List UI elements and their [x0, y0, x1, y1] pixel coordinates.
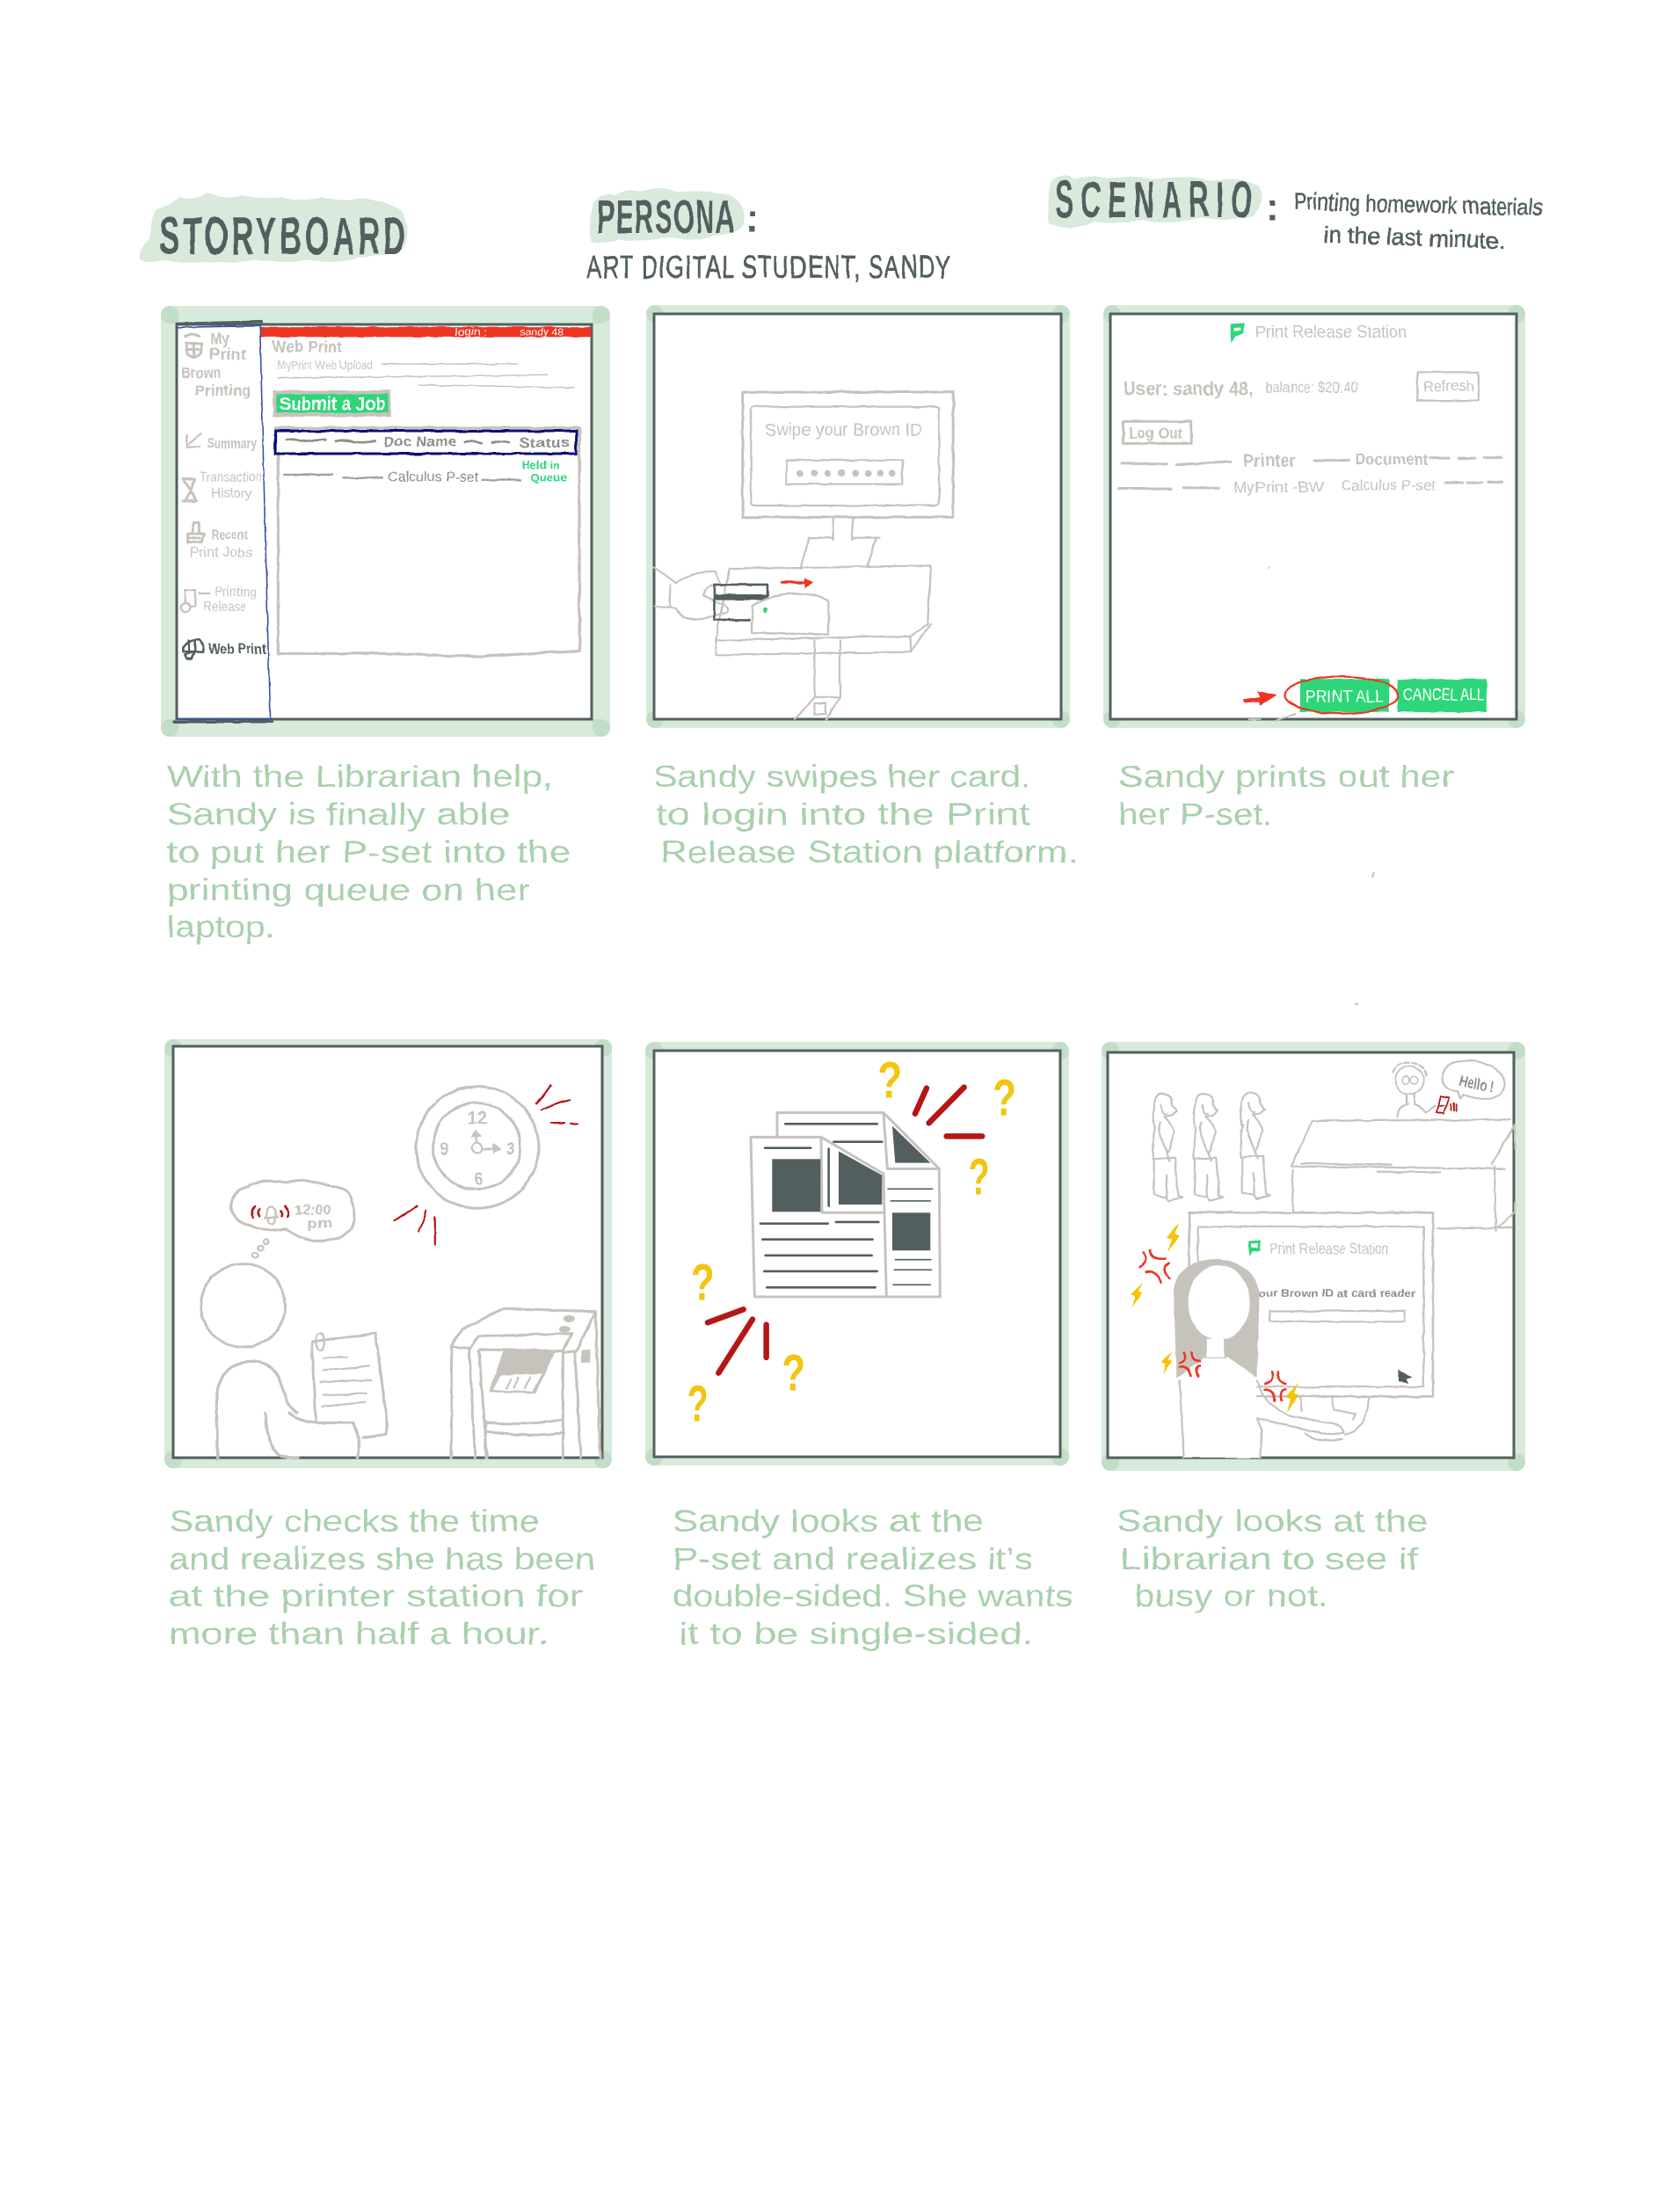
- caption 1: With the Librarian help,: [167, 760, 553, 794]
- sidebar: summary: [187, 433, 258, 452]
- header login text: [455, 326, 564, 338]
- green frame band: [170, 315, 601, 728]
- kiosk monitor: Swipe your Brown ID: [765, 419, 922, 440]
- colon: :: [745, 197, 759, 240]
- sidebar: recent print jobs: Recent: [212, 528, 248, 542]
- header login text: login :: [455, 326, 487, 338]
- caption 4: and realizes she has been: [169, 1542, 595, 1576]
- caption 4: more than half a hour.: [169, 1617, 549, 1651]
- sidebar: printing release: Printing: [215, 586, 257, 600]
- panel frame: [1110, 314, 1516, 719]
- wall clock: 6: [475, 1168, 483, 1189]
- thought bubble: 12:00: [295, 1202, 331, 1219]
- green frame band: [1110, 1051, 1516, 1462]
- thought bubble: [231, 1180, 354, 1258]
- table header row: Doc Name: [383, 434, 457, 450]
- refresh button: [1417, 372, 1479, 401]
- print all button: PRINT ALL: [1305, 687, 1384, 706]
- red arrow: [1243, 691, 1277, 706]
- librarian: [1393, 1062, 1435, 1117]
- sidebar: summary: Summary: [207, 435, 258, 452]
- caption 3: her P-set.: [1118, 797, 1273, 832]
- button: submit a job: Submit a Job: [280, 393, 386, 415]
- caption 2: to login into the Print: [656, 797, 1030, 832]
- back page: [777, 1113, 940, 1297]
- print all button: [1300, 679, 1389, 712]
- caption 4: Sandy checks the time: [169, 1504, 540, 1539]
- station sketch: balance: $20.40: [1266, 379, 1358, 397]
- table rows: MyPrint -BW: [1233, 478, 1325, 496]
- queue of students: [1153, 1092, 1270, 1201]
- scenario description line 1: Printing homework materials: [1293, 188, 1544, 221]
- heading: persona: [586, 189, 951, 285]
- caption 1: laptop.: [167, 910, 275, 944]
- table rows: Calculus P-set: [1341, 477, 1436, 493]
- caption 6: [1116, 1504, 1428, 1613]
- wall clock: 3: [506, 1138, 515, 1159]
- speech bubble: hello: [1443, 1060, 1505, 1099]
- caption 4: at the printer station for: [169, 1579, 583, 1613]
- paper: [311, 1333, 388, 1437]
- scenario description line 2: in the last minute.: [1323, 222, 1506, 254]
- panel 5: double-sided p-set: [654, 1051, 1060, 1457]
- table header row: [276, 431, 577, 454]
- screen sketch: [174, 322, 592, 722]
- speech bubble: hello: Hello !: [1458, 1072, 1495, 1095]
- sidebar: my print logo: My: [210, 331, 230, 349]
- panel frame: [654, 314, 1061, 719]
- kiosk monitor: [743, 392, 953, 517]
- cancel all button: [1398, 679, 1487, 712]
- station sketch: CANCEL ALL: [1403, 686, 1484, 704]
- log out button: Log Out: [1129, 424, 1182, 441]
- table job row: Held in: [522, 459, 560, 471]
- hand holding card: [654, 567, 727, 620]
- panel 4: checking the time: [173, 1046, 603, 1459]
- table rows: [1118, 450, 1502, 496]
- front desk: [1291, 1119, 1515, 1231]
- caption 5: double-sided. She wants: [673, 1579, 1073, 1613]
- sub heading: web upload: MyPrint Web Upload: [277, 359, 373, 373]
- question marks: ?: [969, 1149, 990, 1205]
- caption 6: busy or not.: [1134, 1579, 1328, 1613]
- caption 2: Sandy swipes her card.: [653, 760, 1030, 794]
- wall clock: 9: [440, 1139, 448, 1160]
- question marks: ?: [687, 1377, 709, 1433]
- scene sketch: [1131, 1060, 1515, 1458]
- highlight blob: storyboard: [139, 193, 408, 262]
- caption 3: [1118, 760, 1454, 832]
- scene sketch: [200, 1085, 600, 1459]
- red ringing phone: [1436, 1096, 1457, 1114]
- persona title: PERSONA: [597, 192, 735, 244]
- table rows: Printer: [1243, 450, 1296, 470]
- question marks: [687, 1052, 1016, 1433]
- header login text: sandy 48: [520, 326, 564, 338]
- printer: [451, 1308, 600, 1458]
- clock alarm marks: [395, 1085, 578, 1244]
- caption 2: Release Station platform.: [660, 835, 1078, 870]
- panel frame: [1108, 1052, 1514, 1458]
- sidebar: my print logo: Print: [209, 346, 247, 364]
- monitor: Print Release Station: [1269, 1240, 1389, 1257]
- brown id card: [714, 585, 767, 620]
- thought bubble: pm: [307, 1215, 332, 1232]
- highlight blob: persona: [590, 189, 744, 244]
- log out button: [1123, 421, 1191, 443]
- panel frame: [173, 1046, 602, 1458]
- caption 1: printing queue on her: [167, 873, 530, 907]
- caption 6: Librarian to see if: [1120, 1542, 1418, 1576]
- colon: :: [1266, 186, 1279, 229]
- flag logo and heading: [1231, 323, 1407, 343]
- station sketch: Print Release Station: [1255, 323, 1407, 342]
- person body: [216, 1361, 359, 1459]
- caption 1: to put her P-set into the: [167, 835, 571, 870]
- red header bar: [260, 327, 592, 337]
- sidebar: recent print jobs: Print Jobs: [189, 546, 252, 560]
- sidebar: web print active: [183, 639, 266, 659]
- table rows: Document: [1355, 450, 1428, 469]
- kiosk sketch: [654, 392, 953, 719]
- red circle highlight: [1285, 677, 1398, 714]
- caption 3: Sandy prints out her: [1118, 760, 1454, 794]
- sidebar: transaction history: History: [212, 486, 252, 501]
- table header row: Status: [519, 435, 571, 451]
- wall clock: 12: [467, 1107, 487, 1128]
- question marks: ?: [691, 1255, 715, 1311]
- panel 6: looking at the librarian: [1108, 1051, 1516, 1462]
- caption 2: [653, 760, 1078, 870]
- caption 5: Sandy looks at the: [673, 1504, 984, 1539]
- panel 2: card swipe: [654, 314, 1061, 719]
- question marks: ?: [877, 1052, 902, 1109]
- green frame band: [173, 1048, 603, 1459]
- sandy from behind: [1174, 1259, 1343, 1458]
- heading: scenario: [1048, 171, 1544, 254]
- green frame band: [1112, 314, 1516, 719]
- caption 5: P-set and realizes it’s: [673, 1542, 1033, 1576]
- sidebar: transaction history: [184, 470, 261, 501]
- sidebar: my print logo: [182, 331, 251, 399]
- table job row: Calculus P-set: [388, 469, 479, 484]
- sidebar: printing release: Release: [203, 600, 246, 615]
- caption 4: [169, 1504, 595, 1651]
- sidebar: printing release: [181, 586, 257, 615]
- monitor: [1189, 1212, 1433, 1440]
- sidebar: web print active: Web Print: [208, 641, 266, 657]
- heading: web print: Web Print: [272, 338, 342, 357]
- station sketch: [1118, 323, 1502, 720]
- sidebar: my print logo: Brown: [182, 364, 222, 382]
- question marks: ?: [782, 1346, 805, 1402]
- sidebar: transaction history: Transaction: [200, 470, 261, 484]
- panel 3: print release station: [1110, 314, 1516, 720]
- title text: STORYBOARD: [159, 207, 405, 266]
- caption 5: it to be single-sided.: [679, 1617, 1033, 1651]
- panel frame: [654, 1051, 1060, 1457]
- table job row: Queue: [530, 471, 567, 484]
- caption 1: [167, 760, 571, 944]
- question marks: ?: [993, 1070, 1016, 1126]
- front page: [751, 1137, 886, 1297]
- kiosk stand and reader: [716, 518, 930, 719]
- user balance: User: sandy 48,: [1123, 378, 1254, 400]
- red arrow: [782, 578, 813, 588]
- green frame band: [655, 314, 1061, 719]
- sidebar: recent print jobs: [188, 523, 252, 560]
- heading: storyboard: [139, 193, 408, 266]
- panel frame: [177, 324, 592, 719]
- refresh button: Refresh: [1423, 377, 1474, 395]
- lightning bolts: [1131, 1223, 1298, 1413]
- card reader: [753, 593, 829, 635]
- persona description: ART DIGITAL STUDENT, SANDY: [586, 250, 951, 285]
- highlight blob: scenario: [1048, 176, 1262, 228]
- wall clock: [416, 1087, 539, 1208]
- green frame band: [654, 1051, 1060, 1457]
- person head: [200, 1264, 286, 1347]
- sidebar: my print logo: Printing: [195, 382, 251, 399]
- paper sketch: [687, 1052, 1016, 1433]
- caption 5: [673, 1504, 1073, 1651]
- scenario title: SCENARIO: [1055, 171, 1253, 228]
- job table outline: [275, 428, 579, 657]
- caption 6: Sandy looks at the: [1116, 1504, 1428, 1539]
- sidebar outline: [174, 322, 272, 722]
- panel 1: web print screen: [170, 315, 601, 728]
- anger marks: [1140, 1250, 1285, 1401]
- red emphasis marks: [708, 1088, 982, 1373]
- table job row: [283, 459, 567, 484]
- monitor: our Brown ID at card reader: [1259, 1287, 1416, 1299]
- caption 1: Sandy is finally able: [167, 797, 510, 832]
